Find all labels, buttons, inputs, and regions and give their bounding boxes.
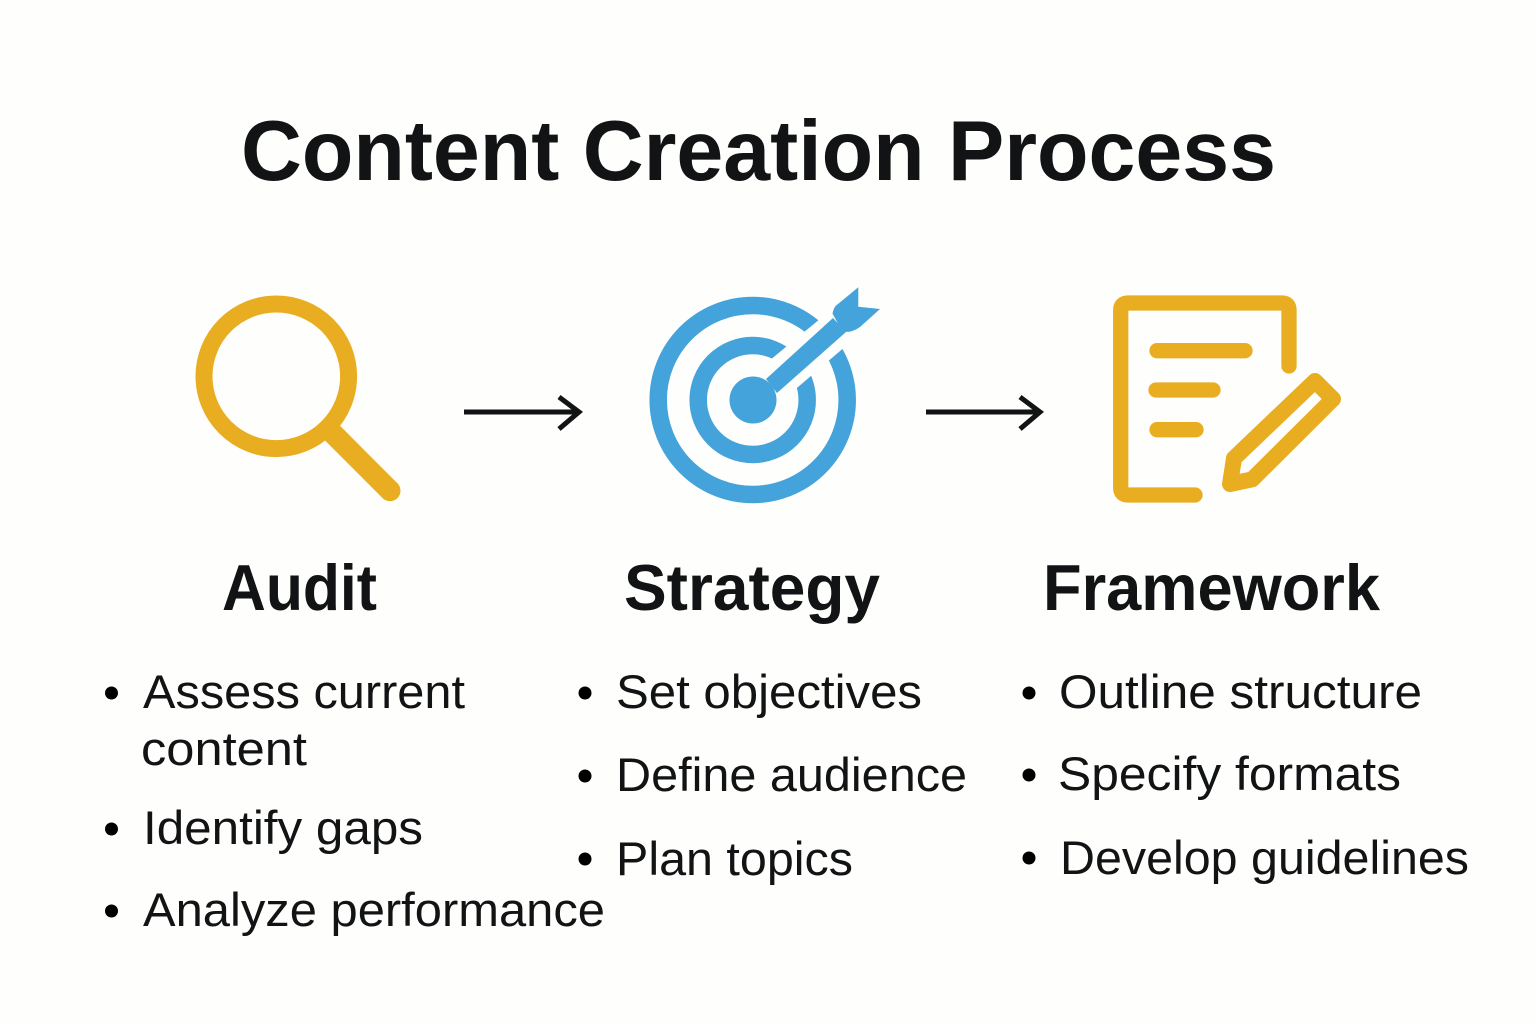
- icon: target with dart: [658, 287, 880, 494]
- list: framework tasks: Develop guidelines: [1060, 831, 1469, 884]
- list: strategy tasks: Plan topics: [616, 832, 853, 885]
- list: strategy tasks: Define audience: [616, 748, 967, 801]
- heading: Strategy: Strategy: [624, 551, 880, 624]
- list: framework tasks: [1022, 665, 1469, 884]
- list: audit tasks: [105, 665, 605, 936]
- list: framework tasks: Specify formats: [1058, 747, 1401, 800]
- title: Content Creation Process: [241, 104, 1276, 199]
- list: strategy tasks: [578, 665, 967, 885]
- list: framework tasks: Outline structure: [1059, 665, 1422, 718]
- heading: Framework: Framework: [1043, 551, 1381, 624]
- icon: document with pencil: [1121, 303, 1333, 495]
- arrow: strategy to framework: [926, 397, 1040, 429]
- list: audit tasks: Assess current: [143, 665, 465, 718]
- arrow: audit to strategy: [464, 397, 579, 429]
- list: audit tasks: content: [141, 722, 307, 775]
- icon: magnifying glass: [204, 304, 390, 491]
- heading: Audit: Audit: [222, 551, 377, 624]
- list: strategy tasks: Set objectives: [616, 665, 922, 718]
- list: audit tasks: Identify gaps: [143, 801, 423, 854]
- list: audit tasks: Analyze performance: [143, 883, 605, 936]
